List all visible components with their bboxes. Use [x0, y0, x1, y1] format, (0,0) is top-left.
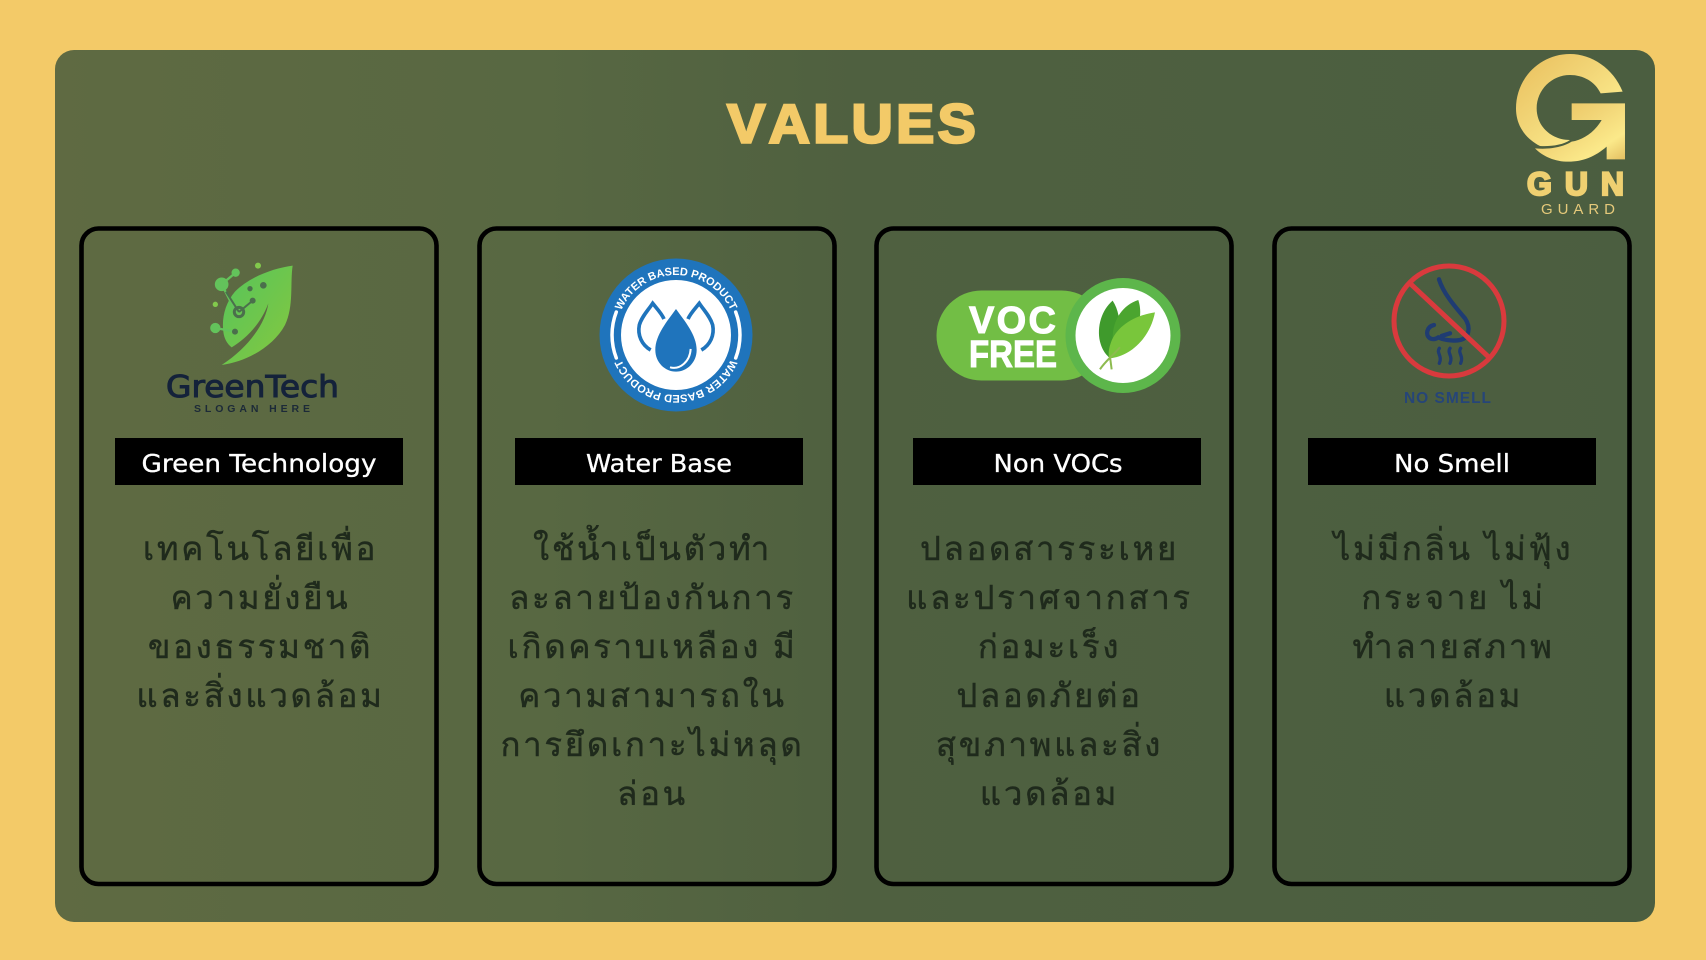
label bar: Water Base [586, 449, 732, 478]
description: ละลายป้องกันการ [509, 579, 796, 616]
description: ไม่มีกลิ่น ไม่ฟุ้ง [1331, 526, 1573, 569]
label bar [913, 438, 1201, 485]
description: ปลอดภัยต่อ [956, 677, 1143, 714]
description: เกิดคราบเหลือง มี [508, 628, 797, 665]
description: และสิ่งแวดล้อม [136, 673, 385, 714]
description: ล่อน [617, 775, 688, 812]
description: แวดล้อม [980, 775, 1119, 812]
description: เทคโนโลยีเพื่อ [143, 526, 378, 567]
description: กระจาย ไม่ [1361, 579, 1546, 616]
icon: VOC free badge: FREE [969, 334, 1057, 376]
icon: GreenTech leaf logo [166, 263, 339, 415]
description: ปลอดสารระเหย [920, 530, 1179, 567]
title: VALUES [727, 92, 979, 154]
panel: No Smell [1274, 228, 1630, 884]
description: และปราศจากสาร [906, 579, 1193, 616]
label bar: Green Technology [142, 449, 376, 478]
panel: Water Base [477, 226, 837, 886]
icon: VOC free badge: VOC [969, 300, 1056, 342]
icon: GreenTech leaf logo: SLOGAN HERE [194, 403, 310, 415]
label bar [515, 438, 803, 485]
description: ทำลายสภาพ [1352, 628, 1555, 665]
icon: VOC free badge [936, 278, 1180, 393]
description [500, 525, 805, 812]
description [906, 530, 1193, 812]
label bar [115, 438, 403, 485]
icon: water based product badge: WATER BASED PRODUCT [614, 361, 738, 403]
description: แวดล้อม [1384, 677, 1523, 714]
description: ใช้น้ำเป็นตัวทำ [533, 525, 772, 567]
description: การยึดเกาะไม่หลุด [500, 726, 805, 765]
label bar: Non VOCs [994, 449, 1122, 478]
description: ความยั่งยืน [171, 575, 350, 616]
description: ความสามารถใน [518, 677, 787, 714]
description [1331, 526, 1573, 714]
logo: Gun Guard: GUARD [1541, 201, 1615, 218]
logo: Gun Guard: GUN [1527, 166, 1624, 202]
panel: Green Technology [82, 228, 436, 884]
label bar [1308, 438, 1596, 485]
icon: water based product badge: WATER BASED PRODUCT [614, 267, 738, 309]
icon: no smell sign: NO SMELL [1404, 390, 1491, 407]
icon: GreenTech leaf logo: GreenTech [166, 370, 339, 405]
icon: water based product badge [600, 258, 752, 412]
panel: Non VOCs [876, 228, 1232, 884]
icon: no smell sign [1394, 266, 1504, 407]
logo: Gun Guard [1516, 54, 1625, 218]
card frame [1274, 228, 1630, 884]
label bar: No Smell [1394, 449, 1510, 478]
card frame [876, 228, 1232, 884]
description [136, 526, 385, 714]
card frame [82, 228, 436, 884]
description: ก่อมะเร็ง [978, 627, 1121, 665]
description: สุขภาพและสิ่ง [936, 722, 1163, 765]
description: ของธรรมชาติ [148, 628, 373, 665]
card frame [480, 228, 834, 884]
